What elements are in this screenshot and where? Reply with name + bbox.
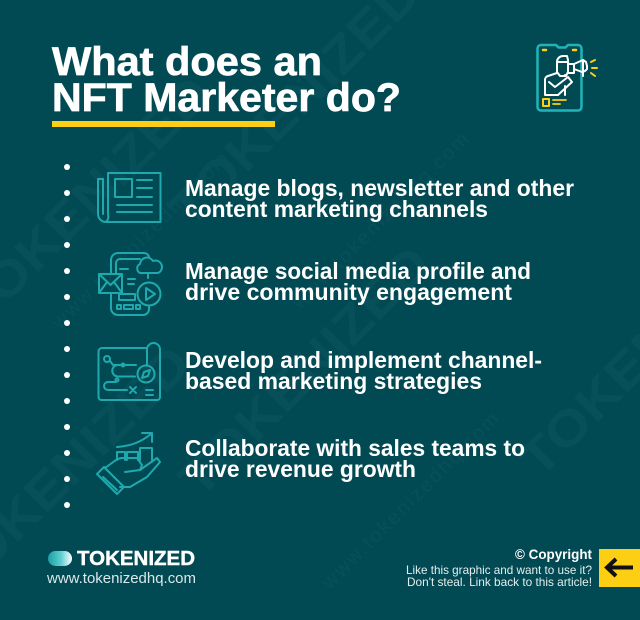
icon: hand with growth chart [97, 433, 160, 494]
text: www.tokenizedhq.com [287, 128, 473, 314]
icon: phone with marketer and megaphone [538, 45, 597, 110]
list text [185, 175, 574, 482]
item 2 text: Manage social media profile and [185, 258, 531, 284]
title: NFT Marketer do? [52, 76, 401, 120]
title underline [52, 121, 275, 127]
item 1 text: Manage blogs, newsletter and other [185, 175, 574, 201]
copyright arrow badge [599, 549, 640, 587]
title [52, 40, 401, 120]
item 4 text [185, 435, 525, 482]
copyright note: © Copyright [515, 546, 592, 562]
text: TOKENIZED [158, 0, 431, 238]
text: www.tokenizedhq.com [317, 408, 503, 594]
icon: social media phone [99, 253, 162, 315]
icon: newspaper [98, 173, 160, 222]
logo wordmark: TOKENIZED [77, 548, 195, 570]
item 4 text: drive revenue growth [185, 456, 416, 482]
item 2 text: drive community engagement [185, 279, 512, 305]
item 3 text [185, 347, 542, 394]
bullet dots [64, 164, 70, 508]
text: www.tokenizedhq.com [47, 148, 233, 334]
logo mark [48, 551, 72, 566]
title: What does an [52, 40, 322, 84]
item 1 text: content marketing channels [185, 196, 488, 222]
item 3 text: Develop and implement channel- [185, 347, 542, 373]
icon: strategy map [98, 343, 160, 400]
copyright note [406, 546, 592, 589]
item 1 text [185, 175, 574, 222]
item 2 text [185, 258, 531, 305]
text: TOKENIZED [168, 235, 441, 508]
item 4 text: Collaborate with sales teams to [185, 435, 525, 461]
item 3 text: based marketing strategies [185, 368, 482, 394]
copyright note: Don't steal. Link back to this article! [407, 575, 592, 589]
website url: www.tokenizedhq.com [46, 570, 196, 587]
copyright note: Like this graphic and want to use it? [406, 563, 592, 577]
